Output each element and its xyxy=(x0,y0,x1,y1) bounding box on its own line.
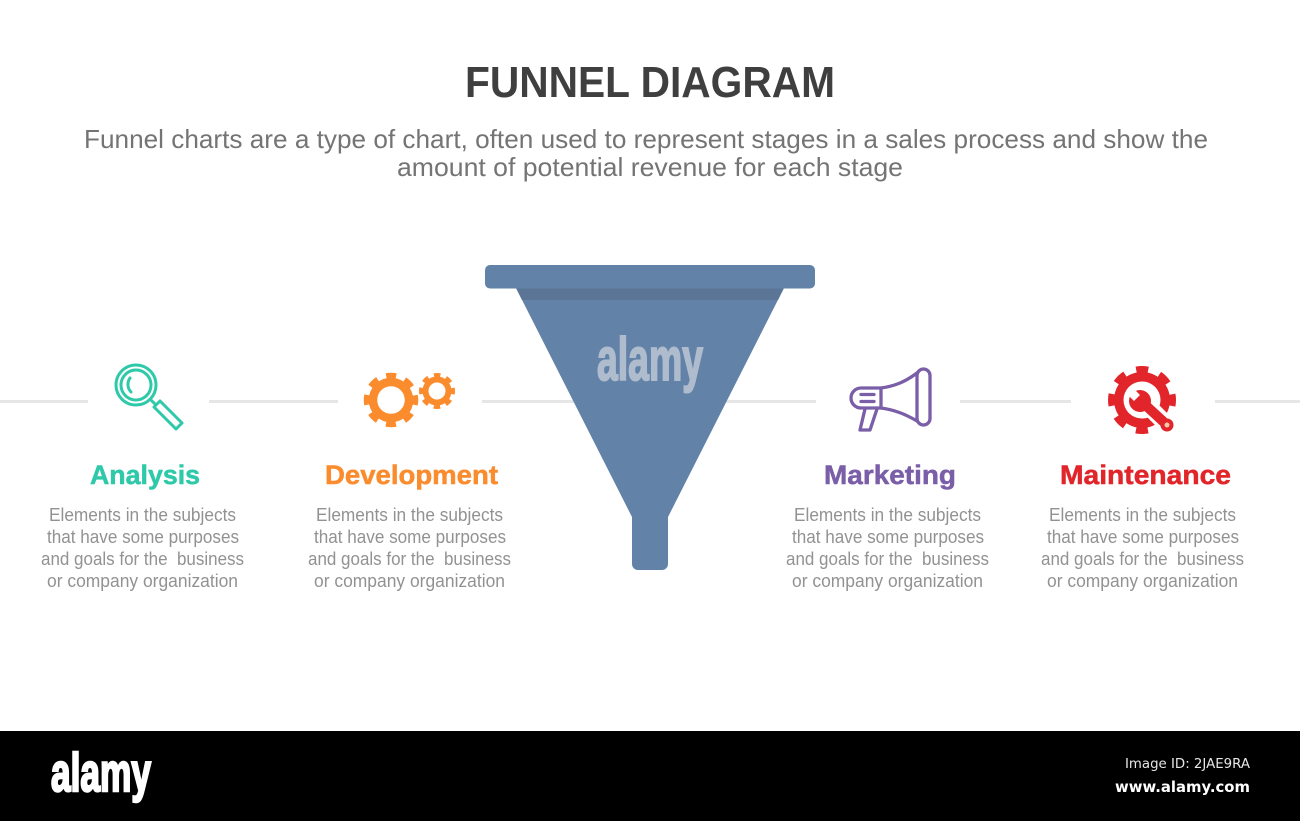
icon: magnifying glass xyxy=(116,365,182,429)
website: www.alamy.com xyxy=(1115,778,1250,796)
text: analysis: Elements in the subjects xyxy=(49,505,236,525)
text: marketing: Elements in the subjects xyxy=(794,505,981,525)
text: analysis: that have some purposes xyxy=(47,527,239,547)
panel: marketing xyxy=(786,369,989,591)
heading: maintenance: Maintenance xyxy=(1060,460,1231,490)
footer logo: alamy xyxy=(51,743,151,803)
text: maintenance: Elements in the subjects xyxy=(1049,505,1236,525)
text: marketing xyxy=(786,505,989,591)
subtitle: amount of potential revenue for each stage xyxy=(397,152,903,182)
text: analysis xyxy=(41,505,244,591)
text: maintenance: that have some purposes xyxy=(1047,527,1239,547)
text: development: or company organization xyxy=(314,571,505,591)
text: development xyxy=(308,505,511,591)
text: marketing: and goals for the business xyxy=(786,549,989,569)
icon: megaphone xyxy=(851,369,930,430)
footer bar xyxy=(0,731,1300,821)
text: development: that have some purposes xyxy=(314,527,506,547)
text: maintenance xyxy=(1041,505,1244,591)
heading: analysis: Analysis xyxy=(90,460,200,490)
text: marketing: or company organization xyxy=(792,571,983,591)
icon: gear with wrench xyxy=(1112,370,1174,432)
text: development: Elements in the subjects xyxy=(316,505,503,525)
panel: maintenance xyxy=(1041,370,1244,591)
icon: gears xyxy=(366,375,453,424)
subtitle xyxy=(84,124,1208,182)
funnel watermark: alamy xyxy=(597,326,703,393)
text: analysis: and goals for the business xyxy=(41,549,244,569)
title: FUNNEL DIAGRAM xyxy=(465,58,835,107)
text: development: and goals for the business xyxy=(308,549,511,569)
funnel xyxy=(485,265,815,570)
heading: development: Development xyxy=(325,460,498,490)
text: marketing: that have some purposes xyxy=(792,527,984,547)
panel: development xyxy=(308,375,511,591)
subtitle: Funnel charts are a type of chart, often used to represent stages in a sales process and show the xyxy=(84,124,1208,154)
text: analysis: or company organization xyxy=(47,571,238,591)
image id: Image ID: 2JAE9RA xyxy=(1125,756,1251,772)
text: maintenance: and goals for the business xyxy=(1041,549,1244,569)
heading: marketing: Marketing xyxy=(824,460,956,490)
panel: analysis xyxy=(41,365,244,591)
text: maintenance: or company organization xyxy=(1047,571,1238,591)
